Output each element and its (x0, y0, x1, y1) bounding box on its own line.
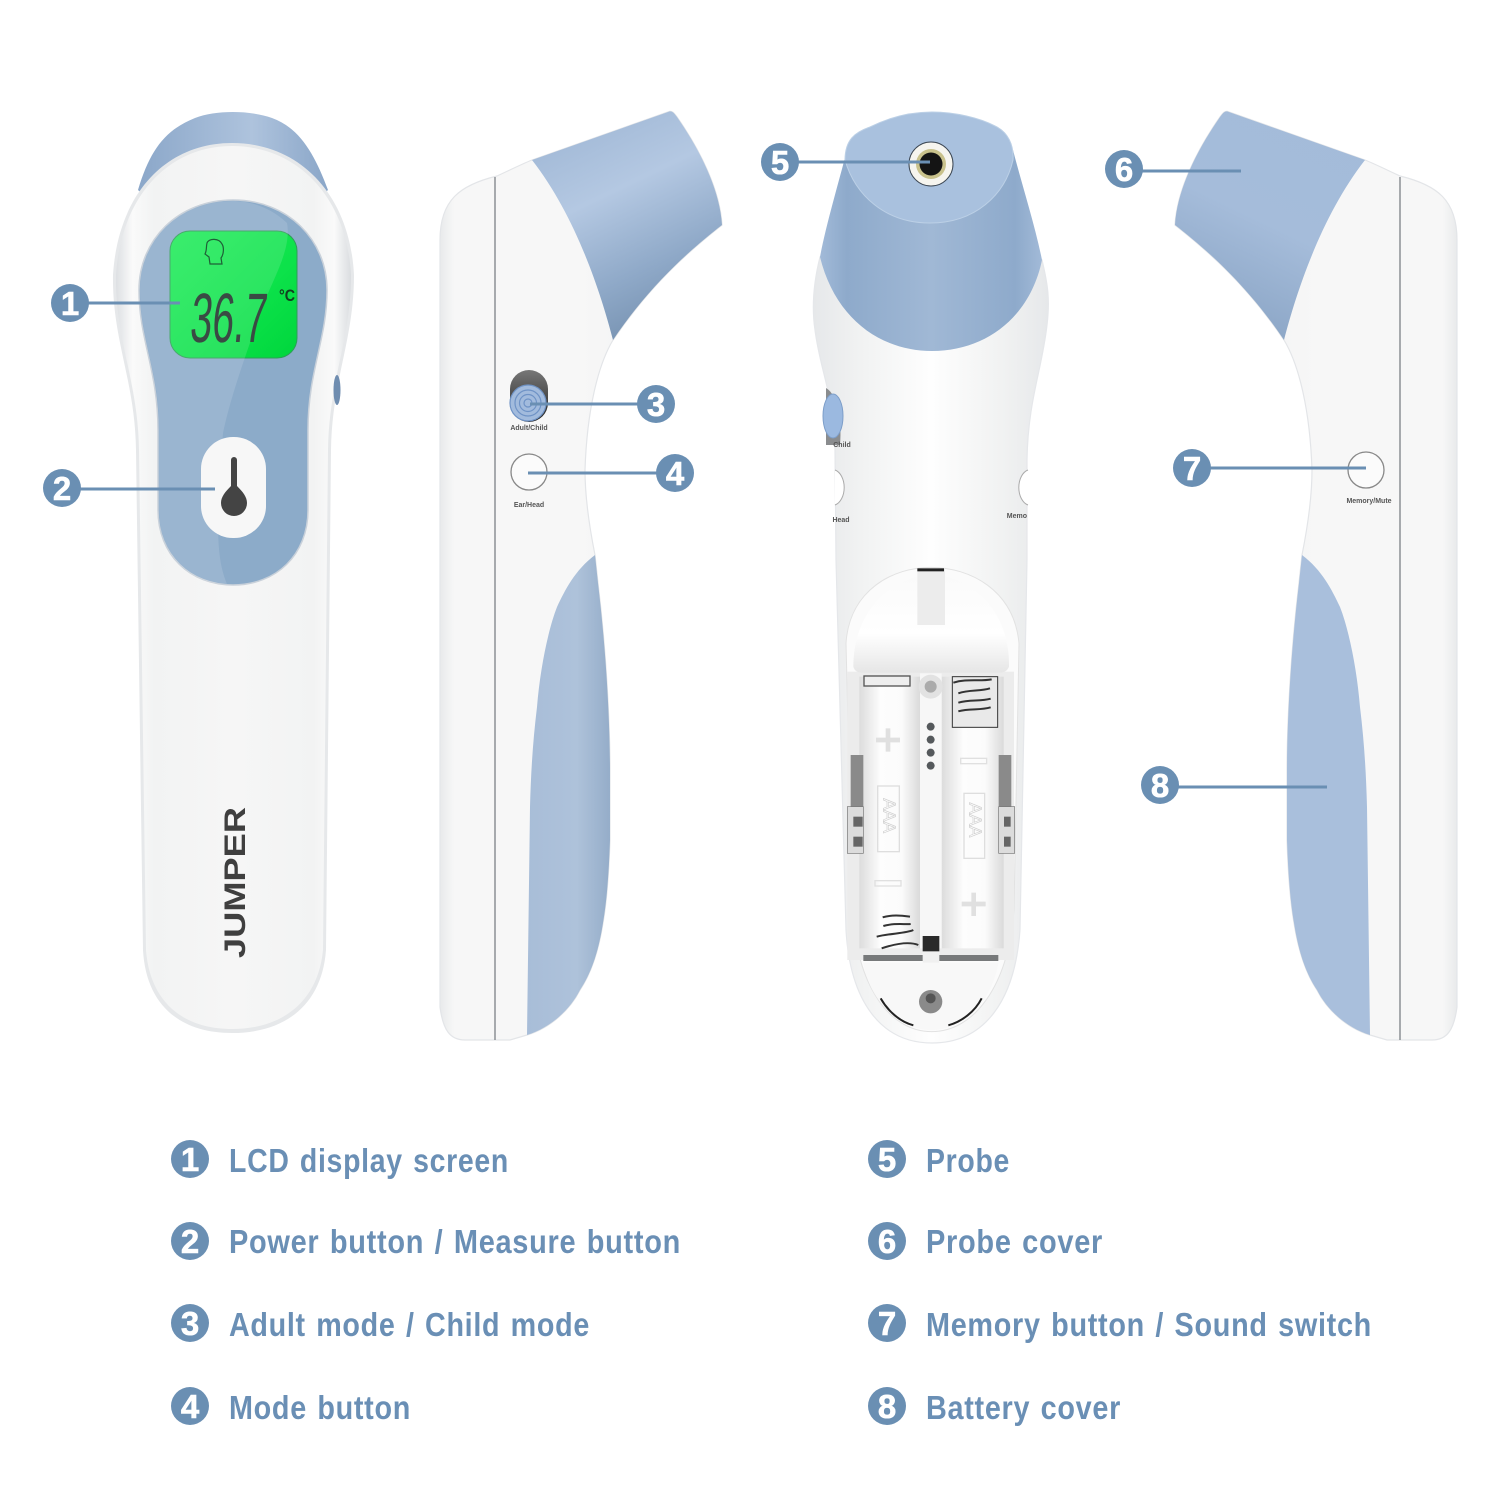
body seam line (1399, 177, 1401, 1040)
legend item 4 (171, 1387, 411, 1426)
compartment outline (846, 567, 1019, 1032)
LCD celsius unit: °C (279, 286, 295, 305)
battery door dome (853, 575, 1009, 673)
legend item 1: LCD display screen (229, 1142, 509, 1179)
LCD head icon (205, 239, 223, 264)
door notch (917, 568, 945, 625)
ear head label: Ear/Head (514, 502, 544, 509)
door notch top edge (917, 568, 944, 571)
legend item 1 (171, 1140, 509, 1179)
grip battery cover (1287, 555, 1370, 1035)
legend item 5 (868, 1140, 1010, 1179)
probe cover (1175, 111, 1365, 340)
right side button (1019, 470, 1028, 505)
battery mark left (878, 786, 899, 852)
grip battery cover (527, 555, 610, 1035)
callout 5: 5 (771, 144, 789, 181)
legend item 8 (868, 1387, 1121, 1426)
probe sensor (909, 142, 953, 186)
callout 5 (761, 143, 930, 181)
minus sign right (961, 758, 987, 764)
rear body shell (813, 257, 1048, 1043)
child label: Child (833, 442, 851, 449)
device: rear view with battery compartment (813, 112, 1048, 1043)
legend item 5: 5 (878, 1141, 896, 1178)
callout 2 (43, 469, 215, 507)
callout 4: 4 (666, 455, 685, 492)
battery bay (847, 672, 1014, 960)
thermometer icon (221, 457, 247, 516)
bottom contact strip (863, 955, 998, 961)
side slider slot (826, 388, 840, 445)
legend left column (171, 1140, 681, 1426)
callout 2: 2 (53, 470, 71, 507)
device: side view right (1175, 111, 1457, 1040)
callout 6: 6 (1115, 151, 1133, 188)
bottom vent slots (881, 998, 982, 1025)
legend item 6 (868, 1222, 1103, 1260)
right latch (999, 755, 1011, 818)
legend item 3: Adult mode / Child mode (229, 1306, 590, 1343)
legend item 4: 4 (181, 1388, 200, 1425)
bottom spring (877, 915, 918, 948)
power button (201, 437, 266, 538)
device: front view (113, 112, 354, 1033)
memory label: Memo (1007, 513, 1027, 520)
left battery tube (859, 677, 920, 948)
legend item 2: 2 (181, 1223, 199, 1260)
side body shell (1175, 111, 1457, 1040)
probe cone (820, 150, 1042, 351)
callout 1 (51, 284, 180, 322)
body seam line (494, 177, 496, 1040)
callout 3: 3 (647, 386, 665, 423)
legend item 6: Probe cover (926, 1223, 1103, 1260)
right battery tube (942, 677, 1004, 948)
front body face (116, 146, 351, 1029)
LCD screen (170, 231, 297, 358)
device: side view left (440, 111, 722, 1040)
legend item 8: Battery cover (926, 1389, 1121, 1426)
AAA label left: AAA (879, 798, 899, 833)
callout 4 (528, 454, 694, 492)
left clip (847, 807, 863, 853)
panel reflection (140, 201, 288, 584)
legend item 6: 6 (878, 1223, 896, 1260)
side slider knob (823, 394, 843, 438)
brand logo: JUMPER (219, 807, 252, 958)
AAA label right: AAA (965, 803, 985, 838)
legend item 8: 8 (878, 1388, 896, 1425)
memory mute label: Memory/Mute (1346, 498, 1392, 505)
callout 3 (530, 385, 675, 423)
minus sign left (875, 881, 901, 886)
blue control panel (139, 200, 327, 585)
callout 1: 1 (61, 285, 79, 322)
battery compartment (846, 567, 1019, 1032)
legend right column (868, 1140, 1372, 1426)
callout 6 (1105, 150, 1241, 188)
indicator dots (927, 723, 935, 770)
adult child knob (510, 385, 546, 421)
center contact (923, 936, 939, 964)
legend item 5: Probe (926, 1142, 1010, 1179)
top spring (952, 677, 998, 727)
legend item 7: Memory button / Sound switch (926, 1306, 1372, 1343)
bottom dome (863, 963, 998, 1030)
mode button (511, 454, 547, 490)
side body shell (440, 111, 722, 1040)
callout 8 (1141, 766, 1327, 804)
bottom screw (919, 990, 942, 1013)
LCD temperature reading: 36.7 (188, 279, 271, 357)
legend item 2: Power button / Measure button (229, 1223, 681, 1260)
callout 8: 8 (1151, 767, 1169, 804)
legend item 1: 1 (181, 1141, 199, 1178)
legend item 7: 7 (878, 1305, 896, 1342)
battery mark right (964, 793, 985, 858)
left side button (835, 470, 844, 505)
memory button (1348, 452, 1384, 488)
right clip (999, 807, 1015, 853)
mirrored side body (1175, 111, 1457, 1040)
plus sign left (876, 728, 900, 752)
front body shell (113, 143, 354, 1033)
callout 7: 7 (1183, 450, 1201, 487)
left latch (851, 755, 863, 818)
probe top surface (845, 112, 1013, 223)
probe cover (532, 111, 722, 340)
probe cap, front view (138, 112, 328, 215)
adult child label: Adult/Child (510, 425, 548, 432)
head label: Head (832, 517, 850, 524)
center ridge (920, 673, 942, 948)
legend item 3: 3 (181, 1305, 199, 1342)
side switch nub (334, 375, 340, 405)
left contact (864, 676, 910, 686)
callout 7 (1173, 449, 1366, 487)
mode slider (510, 370, 548, 422)
top screw (919, 675, 943, 699)
legend item 4: Mode button (229, 1389, 411, 1426)
plus sign right (962, 893, 986, 916)
